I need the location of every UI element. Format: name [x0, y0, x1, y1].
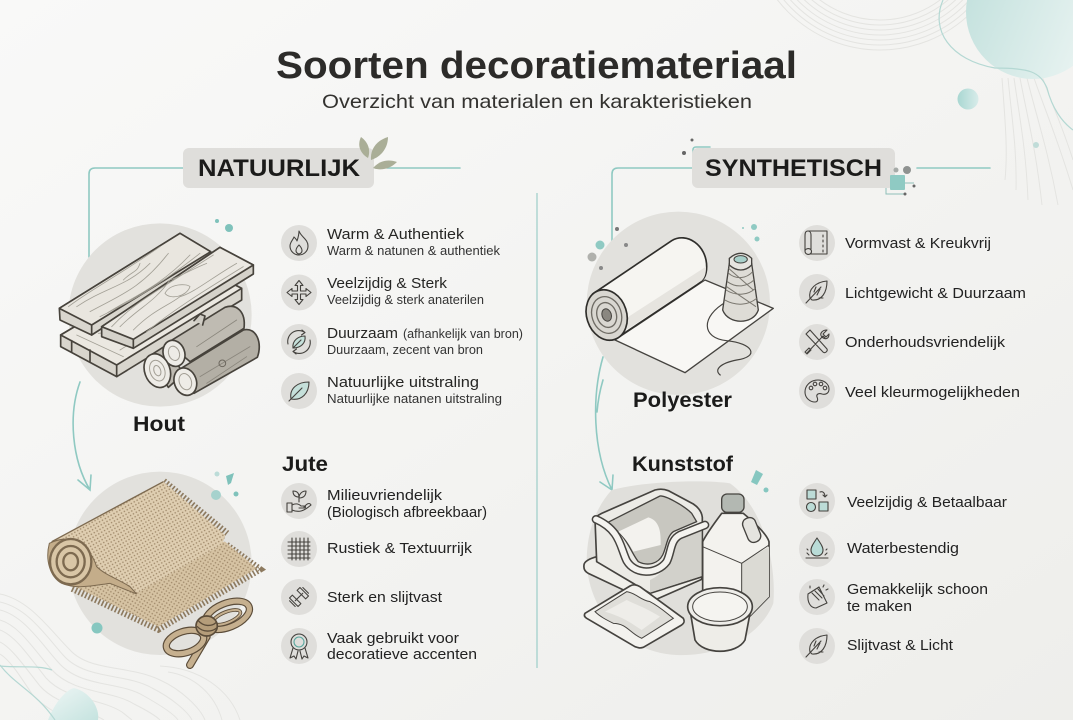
feature: veelzijdig en sterk: Veelzijdig & sterk anaterilen [327, 293, 484, 307]
feature: natuurlijke uitstraling: Natuurlijke natanen uitstraling [327, 392, 502, 406]
icon: synthetic nodes [682, 138, 916, 196]
feature: gemakkelijk schoon [799, 579, 988, 615]
feature: duurzaam [281, 324, 523, 360]
feature: rustiek [281, 531, 473, 567]
heading: synthetisch [692, 148, 895, 188]
dots jute [92, 472, 238, 634]
feature: lichtgewicht: Lichtgewicht & Duurzaam [845, 286, 1026, 302]
icon: cup [688, 588, 752, 651]
icon: thread spool [723, 253, 758, 321]
heading: polyester: Polyester [633, 388, 733, 412]
icon: shapes [799, 483, 835, 519]
illustration: kunststof [584, 481, 774, 655]
icon: dumbbell [281, 579, 317, 615]
icon: wiping hand [799, 579, 835, 615]
feature: warm en authentiek [281, 225, 501, 261]
illustration: jute [48, 472, 260, 665]
subtitle: Overzicht van materialen en karakteristieken [322, 91, 752, 113]
feature: decoratieve accenten: decoratieve accenten [327, 647, 477, 663]
illustration: hout [59, 223, 259, 407]
connector line natuurlijk [89, 168, 460, 257]
center divider [536, 193, 538, 668]
feature: waterbestendig: Waterbestendig [847, 541, 959, 557]
feature: waterbestendig [799, 531, 959, 567]
feature: warm en authentiek: Warm & natunen & authentiek [327, 244, 501, 258]
heading: kunststof: Kunststof [632, 452, 734, 476]
feature: gemakkelijk schoon: Gemakkelijk schoon [847, 582, 988, 598]
connector line synthetisch [612, 147, 990, 255]
feature: natuurlijke uitstraling [281, 373, 502, 409]
feature: veelzijdig en betaalbaar: Veelzijdig & Betaalbaar [847, 495, 1007, 511]
feature: slijtvast en licht: Slijtvast & Licht [847, 638, 953, 654]
feature: sterk: Sterk en slijtvast [327, 590, 442, 606]
feature: rustiek: Rustiek & Textuurrijk [327, 541, 473, 557]
feature: vormvast: Vormvast & Kreukvrij [845, 236, 991, 252]
icon: weave grid [281, 531, 317, 567]
feature: lichtgewicht [799, 274, 1026, 310]
heading: natuurlijk [183, 148, 374, 188]
arrow: hout naar jute [73, 382, 91, 490]
feature: natuurlijke uitstraling: Natuurlijke uitstraling [327, 375, 479, 391]
feature: vormvast [799, 225, 991, 261]
feature: duurzaam: Duurzaam, zecent van bron [327, 343, 483, 357]
feature: kleurmogelijkheden [799, 373, 1020, 409]
decoration: top right waves and blob [750, 0, 1073, 205]
icon: feather [799, 628, 835, 664]
icon: bottle [703, 494, 769, 616]
dots hout [215, 219, 233, 232]
feature: duurzaam: Duurzaam [327, 326, 398, 342]
feature: milieuvriendelijk: (Biologisch afbreekbaar) [327, 505, 487, 521]
icon: rope [163, 595, 253, 665]
feature: decoratieve accenten: Vaak gebruikt voor [327, 631, 459, 647]
icon: leaves [359, 137, 397, 169]
feature: sterk [281, 579, 442, 615]
illustration: polyester [580, 212, 773, 395]
feature: veelzijdig en betaalbaar [799, 483, 1007, 519]
icon: flame [281, 225, 317, 261]
feature: milieuvriendelijk: Milieuvriendelijk [327, 488, 443, 504]
heading: jute: Jute [282, 452, 328, 476]
panel: synthetisch [580, 138, 1026, 664]
dots polyester [588, 224, 760, 270]
feature: gemakkelijk schoon: te maken [847, 599, 912, 615]
arrow: polyester naar kunststof [596, 357, 613, 490]
heading: natuurlijk: NATUURLIJK [198, 155, 361, 182]
icon: recycle leaf [281, 324, 317, 360]
feature: kleurmogelijkheden: Veel kleurmogelijkheden [845, 385, 1020, 401]
dots kunststof [751, 470, 768, 492]
icon: leaf [281, 373, 317, 409]
feature: duurzaam: (afhankelijk van bron) [403, 327, 523, 341]
feature: slijtvast en licht [799, 628, 953, 664]
icon: hand with plant [281, 483, 317, 519]
feature: veelzijdig en sterk [281, 274, 484, 310]
feature: decoratieve accenten [281, 628, 477, 664]
title: Soorten decoratiemateriaal [276, 45, 797, 87]
icon: palette [799, 373, 835, 409]
icon: feather [799, 274, 835, 310]
icon: award rosette [281, 628, 317, 664]
icon: fabric scroll [799, 225, 835, 261]
icon: arrows [281, 274, 317, 310]
heading: hout: Hout [133, 412, 185, 436]
icon: water drop [799, 531, 835, 567]
feature: veelzijdig en sterk: Veelzijdig & Sterk [327, 276, 448, 292]
feature: milieuvriendelijk [281, 483, 487, 521]
panel: natuurlijk [48, 137, 523, 665]
heading: synthetisch: SYNTHETISCH [705, 155, 882, 182]
feature: warm en authentiek: Warm & Authentiek [327, 227, 465, 243]
decoration: bottom left waves and blob [0, 594, 240, 720]
feature: onderhoudsvriendelijk: Onderhoudsvriendelijk [845, 335, 1006, 351]
feature: onderhoudsvriendelijk [799, 324, 1006, 360]
icon: tools [799, 324, 835, 360]
icon: tray [584, 585, 684, 648]
